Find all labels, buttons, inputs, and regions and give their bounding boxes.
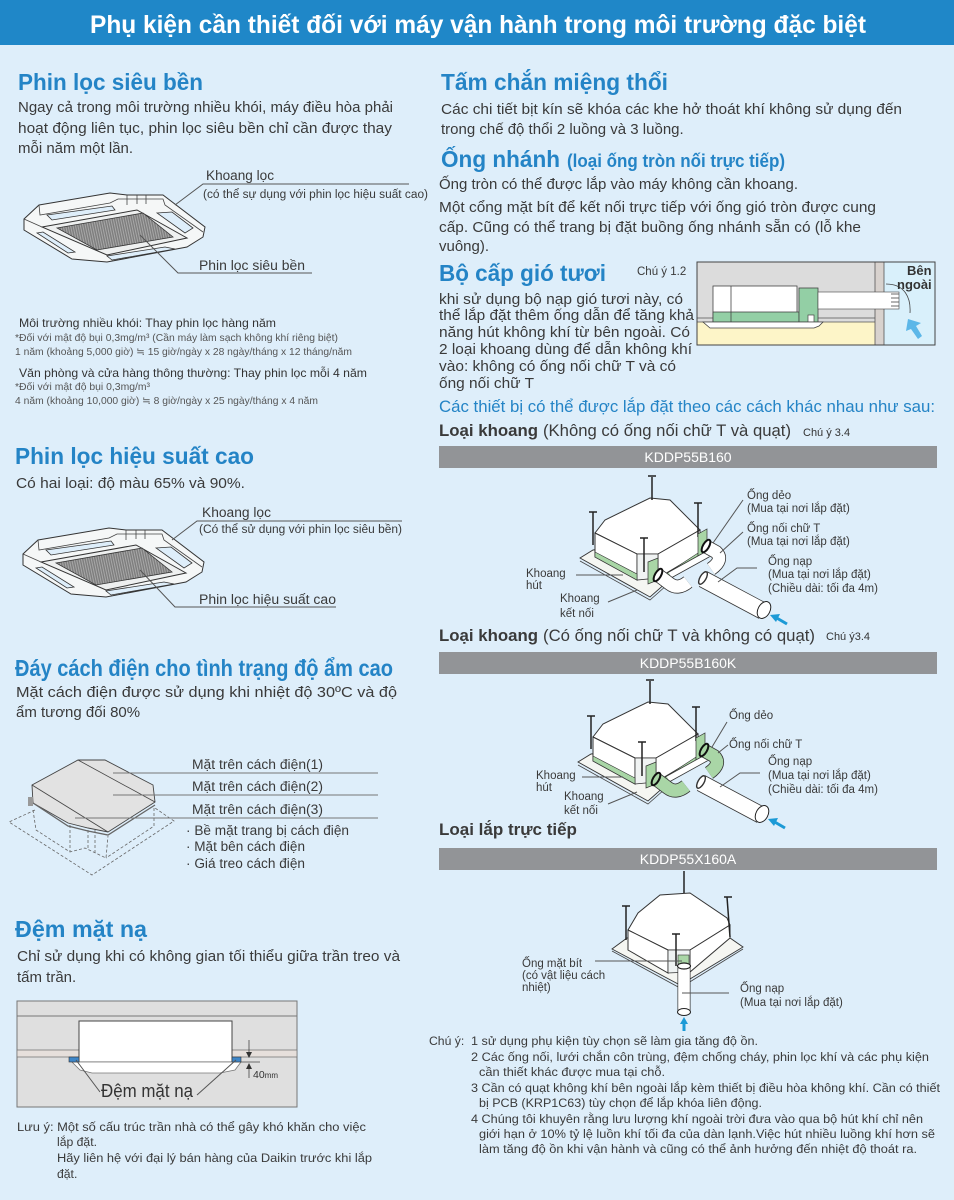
callout: labels: Ống nạp — [740, 981, 784, 995]
text block: notes: làm tăng độ ồn khi vận hành và cũng có thể ảnh hưởng đến nhiệt độ thoát ra. — [479, 1142, 917, 1156]
text block: đáy cách điện description — [16, 684, 397, 721]
heading: loại khoang 2: Loại khoang — [439, 626, 538, 645]
text block: notes: giới hạn ở 10% tỷ lệ luồn khí tối đa của dàn lạnh.Việc hút nhiều luồng khí hơn sẽ — [479, 1127, 935, 1141]
panel: đáy cách điện — [9, 655, 397, 875]
panel: phin lọc siêu bền — [15, 69, 428, 407]
heading: phin lọc siêu bền: Phin lọc siêu bền — [18, 69, 203, 95]
text block: phin lọc siêu bền description: hoạt động liên tục, phin lọc siêu bền chỉ cần được thay — [18, 120, 393, 137]
callout: labels: Khoang — [536, 770, 576, 782]
text block: lưu ý: Lưu ý: Một số cấu trúc trần nhà có thể gây khó khăn cho việc — [17, 1120, 366, 1134]
callout: labels: (Mua tại nơi lắp đặt) — [747, 535, 850, 548]
callout: labels: (Mua tại nơi lắp đặt) — [768, 568, 871, 581]
diagram: cassette with high efficiency filter — [23, 505, 402, 607]
text block: đệm mặt nạ description: tấm trần. — [17, 969, 76, 986]
model bar: KDDP55X160A: KDDP55X160A — [640, 851, 737, 867]
callout: phin lọc siêu bền — [140, 235, 312, 273]
text block: phin lọc siêu bền description: Ngay cả trong môi trường nhiều khói, máy điều hòa phải — [18, 99, 393, 116]
heading: loại khoang 1: (Không có ống nối chữ T và quạt) — [543, 422, 791, 440]
heading: tấm chắn miệng thổi: Tấm chắn miệng thổi — [441, 68, 668, 95]
arrow: intake — [770, 614, 787, 624]
diagram: direct mount unit — [522, 871, 843, 1031]
text block: bộ cấp gió tươi description: thể lắp đặt thêm ống dẫn để tăng khả — [439, 307, 695, 324]
heading: ống nhánh: Ống nhánh — [441, 145, 560, 172]
diagram: cassette with long-life filter — [24, 168, 428, 273]
text block: bộ cấp gió tươi description: năng hút không khí từ bên ngoài. Có — [439, 324, 690, 341]
heading: đáy cách điện: Đáy cách điện cho tình trạng độ ẩm cao — [15, 655, 393, 681]
heading: loại khoang 2 — [439, 626, 815, 645]
callout: khoang lọc: (có thể sự dụng với phin lọc hiệu suất cao) — [203, 189, 428, 201]
model bar: KDDP55B160K — [439, 652, 937, 674]
callout: labels: nhiệt) — [522, 982, 551, 994]
callout: labels: kết nối — [560, 608, 594, 620]
note ref: chú ý 1.2: Chú ý 1.2 — [637, 266, 686, 278]
callout: labels: (Chiều dài: tối đa 4m) — [768, 784, 878, 796]
text block: bộ cấp gió tươi description: khi sử dụng bộ nạp gió tươi này, có — [439, 291, 683, 308]
text block: notes: bị PCB (KRP1C63) tùy chọn để lắp khóa liên động. — [479, 1095, 762, 1110]
text block: phin lọc siêu bền description: mỗi năm một lần. — [18, 140, 133, 157]
text block: ống nhánh description: cấp. Cũng có thể trang bị đặt buồng ống nhánh sẵn có (lỗ khe — [439, 219, 861, 236]
callout: labels: Ống dẻo — [729, 708, 773, 722]
callout: labels: hút — [536, 782, 553, 794]
callout: insulation labels: · Bề mặt trang bị cách điện — [186, 823, 349, 838]
callout: labels: Ống nối chữ T — [747, 521, 820, 535]
text block: hai loại: Có hai loại: độ màu 65% và 90%. — [16, 475, 245, 492]
callout: labels: (Mua tại nơi lắp đặt) — [747, 502, 850, 515]
text block: đáy cách điện description: Mặt cách điện được sử dụng khi nhiệt độ 30ºC và độ — [16, 684, 397, 701]
heading: loại lắp trực tiếp: Loại lắp trực tiếp — [439, 820, 577, 839]
text block: lưu ý: Hãy liên hệ với đại lý bán hàng của Daikin trước khi lắp — [57, 1150, 372, 1165]
panel: đệm mặt nạ — [15, 916, 401, 1181]
title banner — [0, 0, 954, 45]
note ref: chú ý 3.4: Chú ý 3.4 — [803, 427, 850, 439]
text block: filter replacement notes: *Đối với mật độ bụi 0,3mg/m³ (Cần máy làm sạch không khí riêng biệt) — [15, 332, 338, 344]
callout: labels: Ống dẻo — [747, 488, 791, 502]
callout: labels: Ống nối chữ T — [729, 737, 802, 751]
text block: tấm chắn description: Các chi tiết bịt kín sẽ khóa các khe hở thoát khí không sử dụng đến — [441, 101, 902, 118]
callout: insulation labels: · Mặt bên cách điện — [186, 839, 305, 854]
callout: labels: Khoang — [560, 593, 600, 605]
callout: phin lọc hiệu suất cao: Phin lọc hiệu suất cao — [199, 592, 336, 607]
callout: labels: Khoang — [526, 568, 566, 580]
diagram: duct unit without T joint — [526, 476, 878, 624]
text block: notes: 3 Cần có quạt không khí bên ngoài lắp kèm thiết bị điều hòa không khí. Cần có thiết — [471, 1080, 941, 1095]
text block: bộ cấp gió tươi description: 2 loại khoang dùng để dẫn không khí — [439, 341, 693, 358]
model bar: KDDP55B160 — [439, 446, 937, 468]
callout: labels: (Mua tại nơi lắp đặt) — [740, 996, 843, 1009]
text block: ống nhánh description: Ống tròn có thể được lắp vào máy không cần khoang. — [439, 175, 798, 193]
text block: lưu ý: đặt. — [57, 1167, 77, 1181]
icon: ceiling cassette panel — [24, 193, 205, 262]
label: đệm mặt nạ: Đệm mặt nạ — [101, 1081, 194, 1101]
text block: lưu ý: lắp đặt. — [57, 1134, 97, 1149]
heading: bộ cấp gió tươi: Bộ cấp gió tươi — [439, 260, 606, 286]
callout: khoang lọc: Khoang lọc — [202, 505, 271, 520]
arrow: incoming fresh air — [906, 319, 922, 339]
text block: notes: cần thiết khác được mua tại chỗ. — [479, 1064, 665, 1079]
diagram: insulated unit — [9, 760, 174, 875]
callout: labels: Ống nạp — [768, 554, 812, 568]
text block: notes: 1 sử dụng phụ kiện tùy chọn sẽ làm gia tăng độ ồn. — [471, 1034, 758, 1048]
model bar: KDDP55B160: KDDP55B160 — [644, 449, 732, 465]
text block: notes: 4 Chúng tôi khuyên rằng lưu lượng khí ngoài trời đưa vào qua bộ hút khí chỉ nên — [471, 1111, 923, 1126]
text block: đệm mặt nạ description — [17, 948, 401, 986]
text block: bộ cấp gió tươi description: ống nối chữ T — [439, 375, 534, 392]
callout: labels: Khoang — [564, 791, 604, 803]
text block: đáy cách điện description: ẩm tương đối 80% — [16, 704, 140, 721]
heading: ống nhánh: (loại ống tròn nối trực tiếp) — [567, 151, 785, 171]
heading: ống nhánh — [441, 145, 785, 172]
diagram: panel spacer — [17, 1001, 297, 1107]
callout: labels: (có vật liệu cách — [522, 970, 605, 982]
dimension: 40mm — [241, 1040, 278, 1081]
callout: insulation labels: Mặt trên cách điện(1) — [192, 757, 323, 772]
text block: notes — [429, 1034, 941, 1156]
note ref: chú ý 3.4: Chú ý3.4 — [826, 631, 870, 643]
subheading: installation methods: Các thiết bị có thể được lắp đặt theo các cách khác nhau như sau: — [439, 397, 935, 416]
callout: insulation labels — [75, 757, 378, 871]
text block: filter replacement notes: Môi trường nhiều khói: Thay phin lọc hàng năm — [19, 316, 276, 330]
panel: loại khoang có ống nối — [439, 626, 937, 828]
callout: khoang lọc: Khoang lọc — [206, 168, 274, 183]
text block: notes: Chú ý: — [429, 1034, 464, 1048]
text block: ống nhánh description: vuông). — [439, 238, 489, 255]
diagram: fresh air section — [697, 262, 935, 345]
text block: tấm chắn description — [441, 101, 902, 138]
panel: loại khoang không ống nối — [439, 421, 937, 624]
callout: labels: hút — [526, 580, 543, 592]
panel: loại lắp trực tiếp — [439, 820, 937, 1031]
heading: loại khoang 1: Loại khoang — [439, 421, 538, 440]
text block: ống nhánh description — [439, 175, 876, 255]
text block: notes: 2 Các ống nối, lưới chắn côn trùng, đệm chống cháy, phin lọc khí và các phụ kiện — [471, 1049, 929, 1064]
text block: đệm mặt nạ description: Chỉ sử dụng khi có không gian tối thiểu giữa trần treo và — [17, 948, 401, 965]
panel: tấm chắn miệng thổi — [441, 68, 902, 138]
callout: insulation labels: Mặt trên cách điện(3) — [192, 802, 323, 817]
text block: ống nhánh description: Một cổng mặt bít để kết nối trực tiếp với ống gió tròn được cung — [439, 199, 876, 216]
label: bên ngoài: Bên — [907, 263, 932, 278]
callout: labels: Ống mặt bít — [522, 956, 583, 970]
callout: khoang lọc — [175, 168, 428, 205]
callout: labels: (Chiều dài: tối đa 4m) — [768, 583, 878, 595]
model bar: KDDP55B160K: KDDP55B160K — [640, 655, 737, 671]
heading: loại khoang 2: (Có ống nối chữ T và không có quạt) — [543, 627, 815, 645]
callout: khoang lọc: (Có thể sử dụng với phin lọc siêu bền) — [199, 524, 402, 536]
callout: labels: kết nối — [564, 805, 598, 817]
text block: filter replacement notes: 4 năm (khoảng 10,000 giờ) ≒ 8 giờ/ngày x 25 ngày/tháng x 4 năm — [15, 396, 318, 407]
icon: ceiling cassette panel — [23, 528, 204, 597]
title banner: Phụ kiện cần thiết đối với máy vận hành trong môi trường đặc biệt — [90, 11, 867, 39]
callout: labels — [522, 956, 843, 1009]
callout: labels — [536, 708, 878, 817]
text block: filter replacement notes: *Đối với mật độ bụi 0,3mg/m³ — [15, 381, 151, 393]
text block: filter replacement notes: 1 năm (khoảng 5,000 giờ) ≒ 15 giờ/ngày x 28 ngày/tháng x 12 tháng/năm — [15, 347, 352, 358]
callout: labels — [526, 488, 878, 620]
text block: tấm chắn description: trong chế độ thổi 2 luồng và 3 luồng. — [441, 121, 684, 138]
dimension: 40mm: 40mm — [253, 1069, 278, 1081]
diagram: duct unit with T joint — [536, 680, 878, 828]
arrow: intake — [680, 1017, 688, 1031]
callout: labels: Ống nạp — [768, 754, 812, 768]
panel: phin lọc hiệu suất cao — [15, 443, 402, 607]
callout: khoang lọc — [172, 505, 402, 540]
text block: filter replacement notes — [15, 316, 367, 407]
callout: labels: (Mua tại nơi lắp đặt) — [768, 769, 871, 782]
model bar: KDDP55X160A — [439, 848, 937, 870]
label: bên ngoài: ngoài — [897, 277, 932, 292]
callout: phin lọc hiệu suất cao — [140, 570, 336, 607]
panel: ống nhánh — [439, 145, 876, 255]
text block: phin lọc siêu bền description — [18, 99, 393, 157]
heading: loại khoang 1 — [439, 421, 791, 440]
text block: bộ cấp gió tươi description — [439, 291, 695, 392]
text block: lưu ý — [17, 1120, 372, 1181]
text block: bộ cấp gió tươi description: vào: không có ống nối chữ T và có — [439, 358, 676, 375]
text block: filter replacement notes: Văn phòng và cửa hàng thông thường: Thay phin lọc mỗi 4 năm — [19, 365, 367, 380]
heading: đệm mặt nạ: Đệm mặt nạ — [15, 916, 147, 942]
callout: insulation labels: Mặt trên cách điện(2) — [192, 779, 323, 794]
panel: bộ cấp gió tươi — [439, 260, 935, 416]
callout: phin lọc siêu bền: Phin lọc siêu bền — [199, 258, 305, 273]
callout: insulation labels: · Giá treo cách điện — [186, 856, 305, 871]
heading: phin lọc hiệu suất cao: Phin lọc hiệu suất cao — [15, 443, 254, 469]
